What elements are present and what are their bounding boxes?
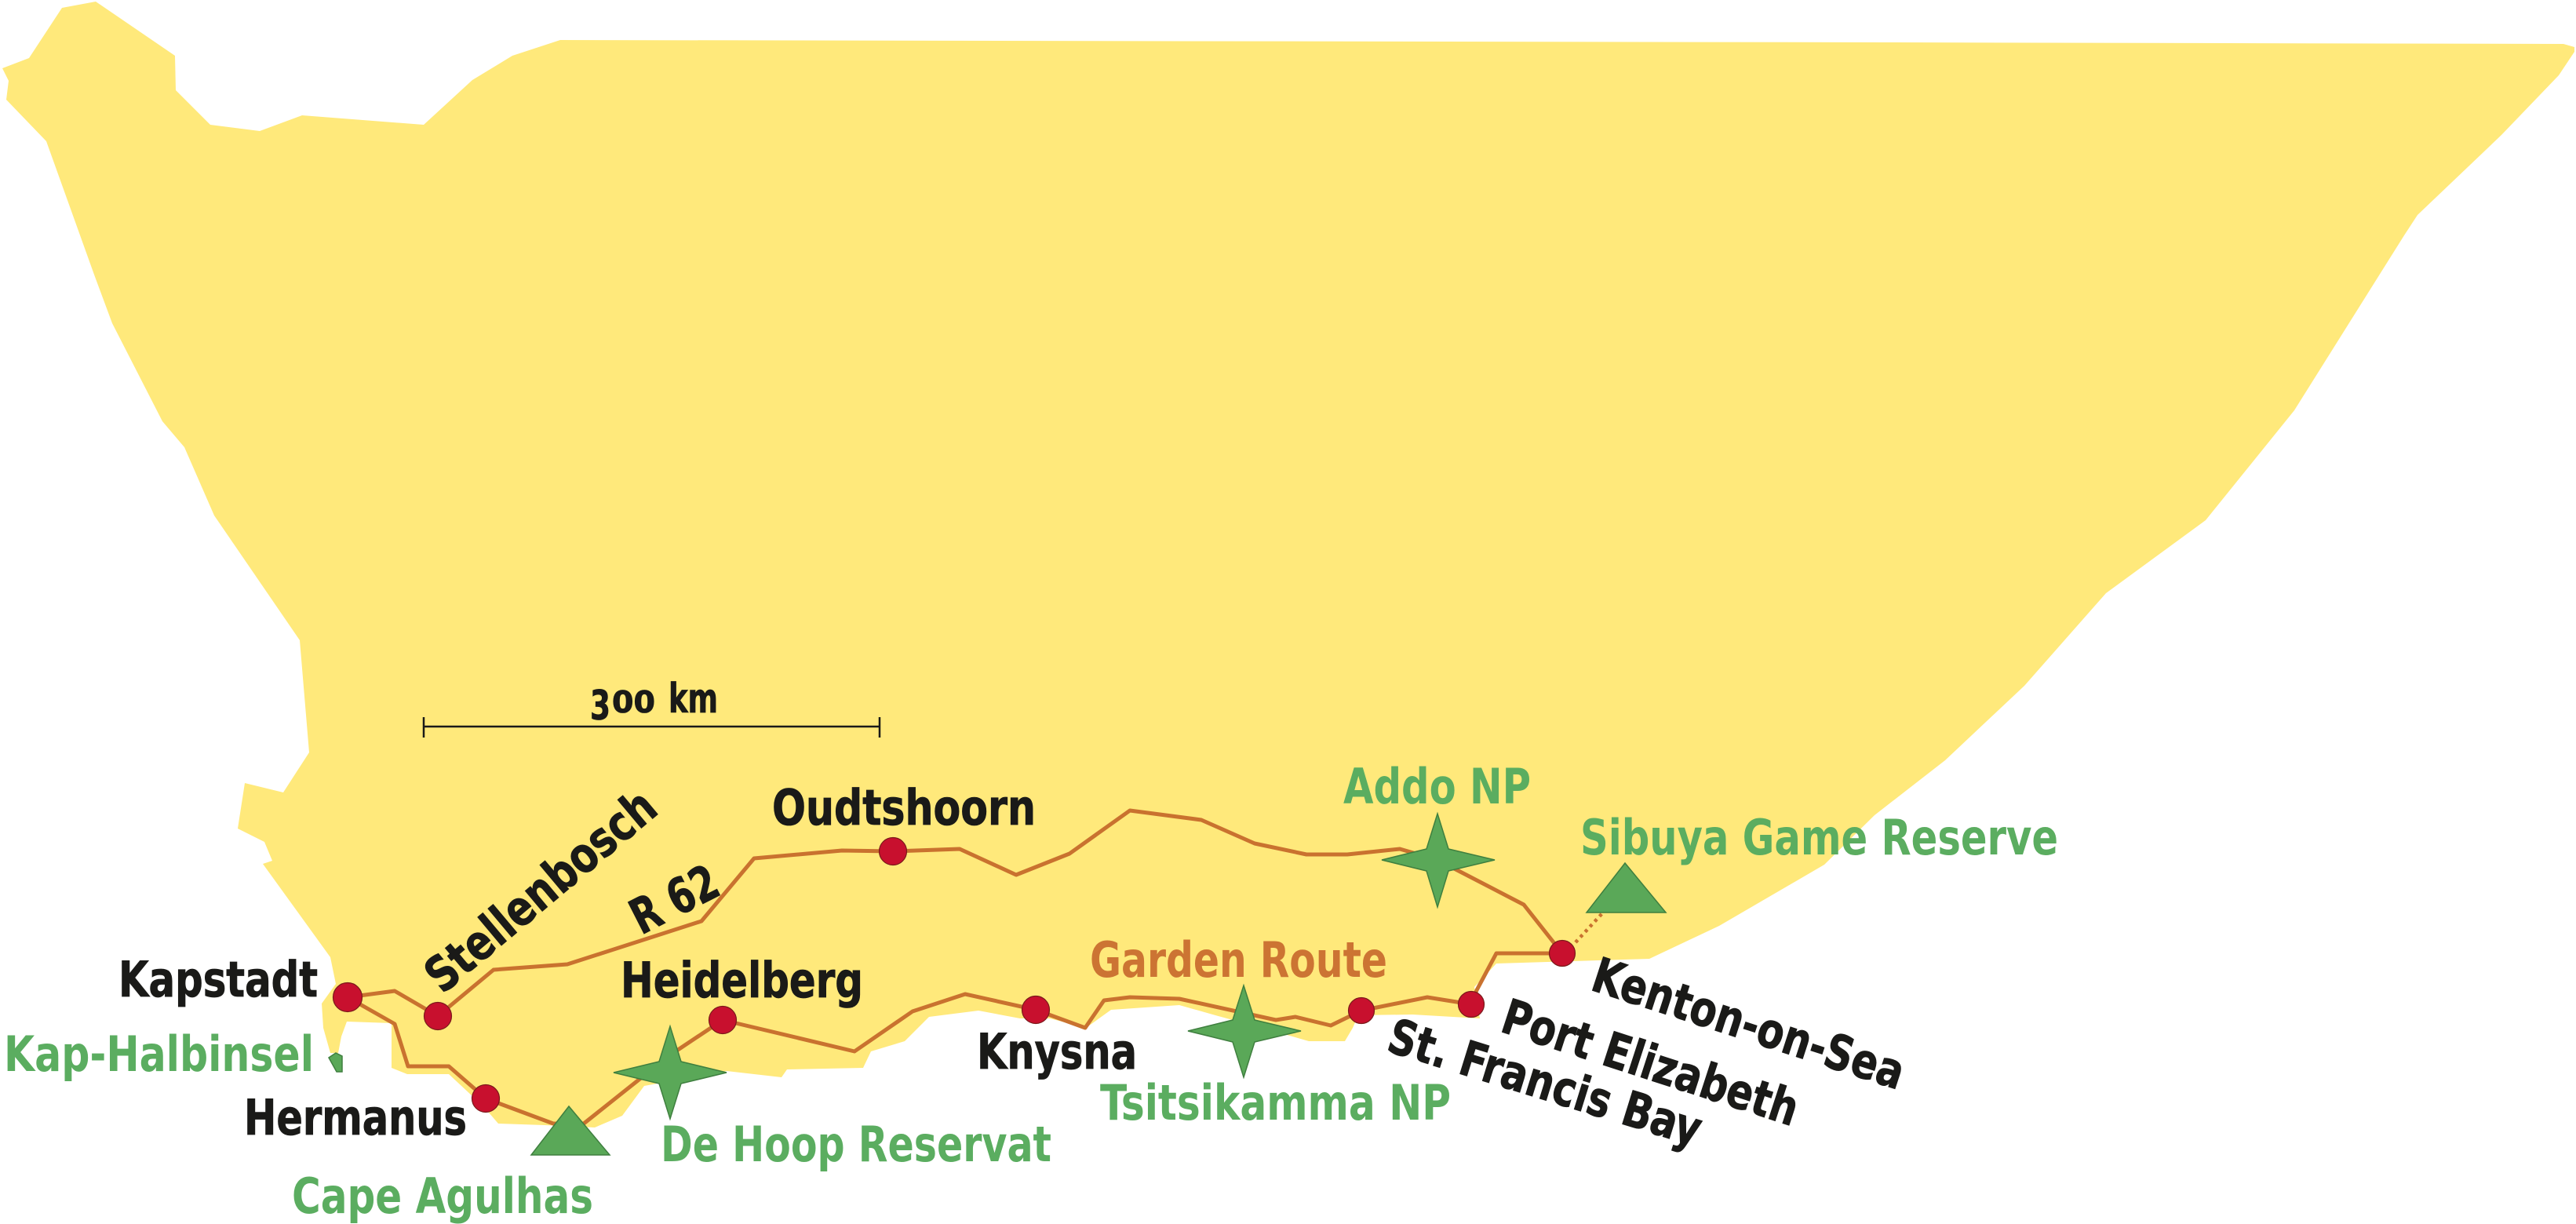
scale label	[590, 676, 718, 730]
park and reserve labels: Addo NP	[1343, 758, 1531, 815]
town labels: Port Elizabeth	[1495, 988, 1806, 1138]
scale bar	[424, 676, 880, 738]
park and reserve labels	[4, 758, 2058, 1224]
town labels: Kapstadt	[118, 951, 318, 1008]
park and reserve labels: De Hoop Reservat	[661, 1116, 1051, 1173]
town labels: St. Francis Bay	[1382, 1007, 1709, 1158]
routes	[348, 811, 1603, 1124]
scale label: 00	[612, 685, 655, 719]
dotted link to Sibuya	[1576, 913, 1603, 942]
town labels: Oudtshoorn	[772, 779, 1036, 836]
reserve triangle icons	[531, 863, 1666, 1155]
Garden Route coastal road	[348, 953, 1562, 1124]
scale label: 3	[590, 683, 610, 730]
park and reserve labels: Tsitsikamma NP	[1100, 1074, 1451, 1131]
town labels: Kenton-on-Sea	[1585, 946, 1912, 1101]
R 62 inland route	[348, 811, 1562, 1016]
town labels: R 62	[621, 853, 728, 945]
park and reserve labels: Sibuya Game Reserve	[1580, 809, 2058, 866]
national park star icons	[614, 814, 1495, 1119]
town labels: Hermanus	[244, 1089, 467, 1146]
park and reserve labels: Kap-Halbinsel	[4, 1025, 314, 1083]
town markers	[333, 838, 1576, 1113]
Garden Route label: Garden Route	[1090, 931, 1387, 989]
town labels: Heidelberg	[621, 952, 863, 1009]
town labels: Stellenbosch	[414, 778, 668, 1004]
park and reserve labels: Cape Agulhas	[292, 1168, 593, 1224]
town labels	[118, 778, 1912, 1158]
scale label: km	[669, 676, 718, 723]
icon: Kap-Halbinsel marker	[329, 1053, 342, 1072]
town labels: Knysna	[977, 1023, 1137, 1080]
